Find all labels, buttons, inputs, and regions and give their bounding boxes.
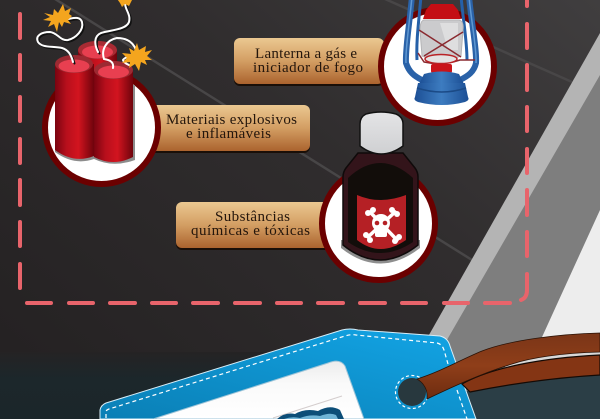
icon: poison bottle <box>341 112 420 264</box>
label: lantern <box>234 38 384 86</box>
bottle body <box>343 153 418 260</box>
dark liquid <box>348 163 413 253</box>
circle: chemicals <box>322 167 435 280</box>
inner frame rods <box>417 0 467 60</box>
blue tank base <box>414 72 469 105</box>
label: explosives: e inflamáveis <box>186 126 271 142</box>
card rule <box>273 396 342 418</box>
price tag <box>100 329 476 419</box>
outer frame tubes <box>406 0 476 80</box>
frame highlights <box>406 0 476 63</box>
wire guard <box>418 30 475 64</box>
white card <box>153 361 364 419</box>
label: lantern: iniciador de fogo <box>253 60 363 76</box>
left stick <box>55 55 94 159</box>
skull and crossbones <box>363 207 402 244</box>
teal panel behind tag <box>460 370 600 419</box>
blue logo lettering fragment <box>277 407 344 419</box>
glass <box>420 20 463 60</box>
red label <box>357 195 406 249</box>
circle: lantern <box>381 10 494 123</box>
label: chemicals <box>176 202 331 250</box>
red burner <box>425 54 457 73</box>
label: chemicals: químicas e tóxicas <box>191 223 310 239</box>
red cap <box>423 4 461 19</box>
label: lantern: Lanterna a gás e <box>255 46 357 62</box>
fuse shadows <box>39 4 131 64</box>
eyelet stitching <box>396 376 428 408</box>
cap <box>360 112 403 154</box>
leather strap <box>417 333 600 399</box>
stick shadow <box>55 85 135 164</box>
dashed safety border <box>20 0 527 303</box>
eyelet hole <box>398 378 426 406</box>
right stick <box>94 61 133 162</box>
sparks <box>43 4 72 32</box>
teal lower band <box>0 352 600 419</box>
fuses <box>37 3 136 68</box>
label: explosives: Materiais explosivos <box>166 112 297 128</box>
icon: dynamite <box>37 0 152 164</box>
rear strap <box>462 355 600 392</box>
label: explosives <box>150 105 310 153</box>
stitching <box>106 335 467 419</box>
bottle shadow <box>341 190 420 264</box>
icon: lantern <box>406 0 476 105</box>
front strap <box>417 333 600 399</box>
glass highlight <box>440 23 458 50</box>
back stick <box>78 41 117 80</box>
diagonal road lines <box>55 0 572 260</box>
road stripes <box>425 33 600 400</box>
white strip with stitches <box>505 346 600 372</box>
circle: explosives <box>45 71 158 184</box>
label: chemicals: Substâncias <box>215 209 290 225</box>
